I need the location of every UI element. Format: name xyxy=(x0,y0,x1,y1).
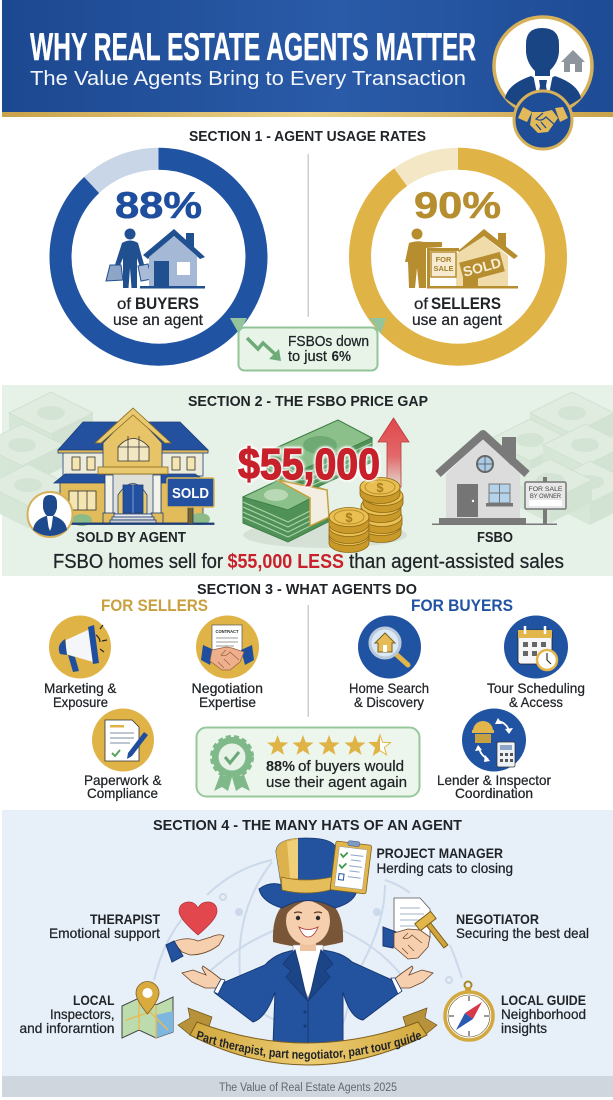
sold sign xyxy=(167,478,214,507)
label: local: and inforarntion xyxy=(20,1020,114,1036)
hair xyxy=(273,895,343,947)
for sale by owner sign: FOR SALE xyxy=(528,486,563,493)
item: lender and inspector xyxy=(437,708,551,801)
label xyxy=(437,772,551,801)
label: & Discovery xyxy=(354,694,424,710)
subheading: for sellers: FOR SELLERS xyxy=(101,597,208,615)
label: local guide: insights xyxy=(501,1020,547,1036)
label: negotiator: Securing the best deal xyxy=(456,925,589,941)
label: Expertise xyxy=(199,694,256,710)
label xyxy=(487,680,585,710)
callout: would use again xyxy=(196,728,420,796)
coin stacks xyxy=(329,478,403,552)
ribbon banner xyxy=(178,1008,438,1066)
icon: down trend arrow xyxy=(247,338,276,355)
label: local xyxy=(20,992,115,1036)
icon: heart in hand xyxy=(166,902,224,962)
section 1 divider xyxy=(308,154,309,317)
icon: agent portrait xyxy=(494,17,592,115)
label xyxy=(44,680,117,710)
stat: 88%: 88% xyxy=(115,185,202,226)
panel: section 4 many hats xyxy=(2,810,613,1076)
subheading: for buyers: FOR BUYERS xyxy=(411,597,513,615)
label: & Access xyxy=(509,694,563,710)
icon: seller with signs and house xyxy=(405,228,518,288)
item: home search xyxy=(349,616,429,710)
subtitle: The Value Agents Bring to Every Transaction xyxy=(30,68,466,90)
for sale by owner sign xyxy=(525,482,566,509)
rating stars xyxy=(267,735,390,755)
callout text: FSBOs down xyxy=(288,334,369,350)
icon: clipboard checklist xyxy=(330,839,372,894)
label xyxy=(192,680,263,710)
label: Marketing & xyxy=(44,680,117,696)
label: Negotiation xyxy=(192,680,263,696)
sold sign: SOLD xyxy=(172,485,209,502)
caption: price gap: $55,000 LESS xyxy=(228,551,344,573)
icon: seller with signs and house: SOLD xyxy=(461,254,503,280)
illustration: agent woman xyxy=(182,838,433,1045)
callout text: 6% xyxy=(332,349,351,365)
jacket xyxy=(215,950,400,1045)
top bills xyxy=(267,420,372,494)
callout text xyxy=(288,334,369,365)
icon: helmet, arrows, calculator xyxy=(462,708,526,772)
label: local: Inspectors, xyxy=(50,1006,114,1022)
section 4 heading: SECTION 4 - THE MANY HATS OF AN AGENT xyxy=(153,817,462,834)
label: of sellers xyxy=(412,295,503,329)
hands xyxy=(182,966,433,988)
label: sold by agent: SOLD BY AGENT xyxy=(76,530,186,546)
item: negotiation expertise xyxy=(192,616,263,710)
icon: contract handshake: CONTRACT xyxy=(216,629,239,634)
label: project manager: PROJECT MANAGER xyxy=(376,845,503,861)
label: Tour Scheduling xyxy=(487,680,585,696)
label: project manager xyxy=(376,845,513,876)
icon: magnifier over house xyxy=(358,616,421,678)
donut chart: 90 percent xyxy=(360,159,556,355)
label xyxy=(349,680,429,710)
label: local guide: Neighborhood xyxy=(501,1006,586,1022)
caption: price gap: than agent-assisted sales xyxy=(349,551,564,573)
label: Home Search xyxy=(349,680,429,696)
icon: megaphone xyxy=(49,616,111,678)
callout text: to just xyxy=(288,349,327,365)
label: project manager: Herding cats to closing xyxy=(376,860,513,876)
panel: section 2 price gap xyxy=(0,385,613,576)
icon: rosette xyxy=(212,737,252,791)
for sale by owner sign: BY OWNER xyxy=(530,494,562,500)
label: Exposure xyxy=(53,694,108,710)
section 1 heading: SECTION 1 - AGENT USAGE RATES xyxy=(189,129,426,145)
label: therapist xyxy=(49,911,160,941)
label xyxy=(84,772,162,801)
label: of buyers: use an agent xyxy=(113,312,204,329)
panel: sellers donut xyxy=(360,159,556,355)
ribbon banner: Part therapist, part negotiator, part tour guide xyxy=(196,1030,422,1062)
face xyxy=(300,935,316,951)
icon: agent avatar xyxy=(28,492,72,537)
top hat xyxy=(259,838,357,908)
callout: FSBOs down xyxy=(230,318,386,370)
icon: buyer and house xyxy=(106,228,205,288)
icon: compass xyxy=(445,982,493,1040)
item: paperwork and compliance xyxy=(84,708,162,801)
bottom bills xyxy=(243,478,329,542)
label: of sellers: use an agent xyxy=(412,312,503,329)
label: Lender & Inspector xyxy=(437,772,551,788)
label: of buyers: BUYERS xyxy=(135,295,199,313)
label: Coordination xyxy=(455,785,533,801)
label: of sellers: SELLERS xyxy=(431,295,501,313)
icon: seller with signs and house: SALE xyxy=(433,264,454,273)
label: local guide xyxy=(501,992,586,1036)
footer: The Value of Real Estate Agents 2025 xyxy=(219,1082,397,1094)
label: therapist: Emotional support xyxy=(49,925,160,941)
section 3 heading: SECTION 3 - WHAT AGENTS DO xyxy=(197,581,417,598)
caption: price gap xyxy=(53,551,564,573)
icon: money and coins xyxy=(238,418,409,552)
section 2 heading: SECTION 2 - THE FSBO PRICE GAP xyxy=(188,394,428,410)
coin stacks: $ xyxy=(376,480,384,495)
icon: FSBO house xyxy=(432,434,566,525)
icon: calendar and clock xyxy=(504,616,568,678)
panel: buyers donut xyxy=(60,159,256,355)
icon: handshake badge xyxy=(514,91,572,149)
icon: seller with signs and house: FOR xyxy=(436,255,452,264)
donut chart: 88 percent xyxy=(60,159,256,355)
icon: map and pin xyxy=(122,982,173,1038)
footer xyxy=(2,1076,613,1097)
stat: $55,000: $55,000 xyxy=(238,440,380,489)
item: tour scheduling xyxy=(487,616,585,710)
item: marketing and exposure xyxy=(44,616,117,710)
callout text: use their agent again xyxy=(266,774,407,791)
label: Paperwork & xyxy=(84,772,162,788)
callout text: 88% xyxy=(266,758,295,775)
icon: document, gavel, handshake xyxy=(383,898,453,959)
header banner xyxy=(2,0,613,149)
label: of buyers xyxy=(113,295,204,329)
label: of buyers: of xyxy=(117,296,132,313)
label: negotiator: NEGOTIATOR xyxy=(456,911,539,927)
label: FSBO: FSBO xyxy=(477,530,513,546)
stat: 90%: 90% xyxy=(414,185,501,226)
label: local guide: LOCAL GUIDE xyxy=(501,992,586,1008)
label: local: LOCAL xyxy=(73,992,115,1008)
icon: house sold by agent xyxy=(54,408,214,526)
label: Compliance xyxy=(87,785,158,801)
label: negotiator xyxy=(456,911,589,941)
callout text xyxy=(266,758,407,791)
icon: document and pen xyxy=(92,708,154,772)
coin stacks: $ xyxy=(345,510,353,525)
arrow: price up xyxy=(378,418,409,487)
caption: price gap: FSBO homes sell for xyxy=(53,551,223,573)
callout text: of buyers would xyxy=(298,758,404,775)
label: therapist: THERAPIST xyxy=(90,911,160,927)
label: of sellers: of xyxy=(414,296,429,313)
